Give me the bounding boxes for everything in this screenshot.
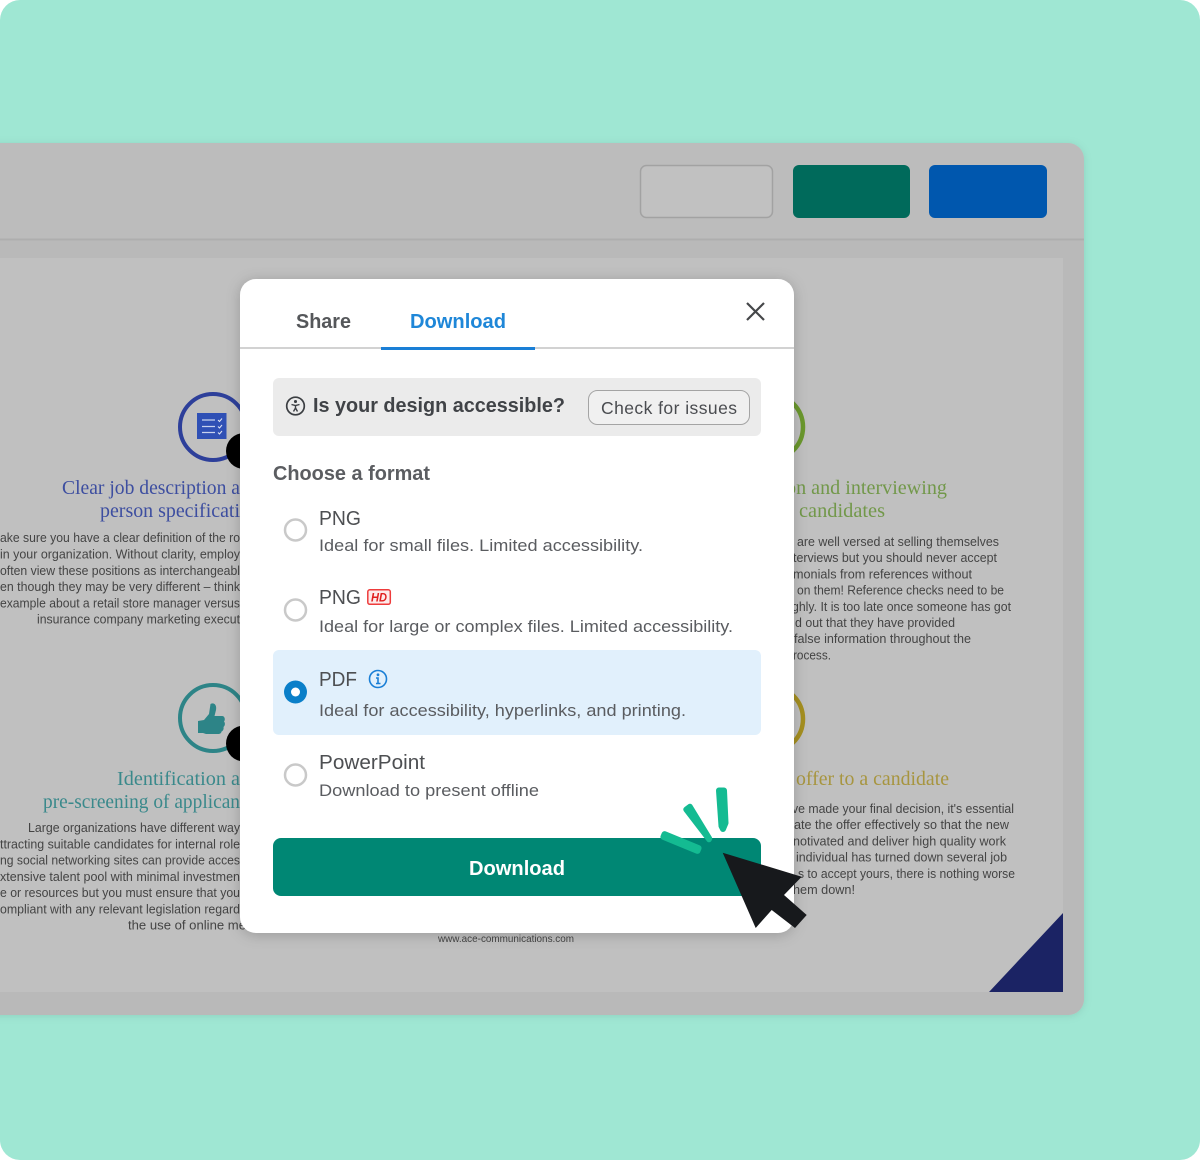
- icon: accessibility: [287, 397, 304, 415]
- option: PowerPoint: [285, 752, 539, 800]
- icon: close: [747, 303, 764, 320]
- icon: click sparks: [663, 790, 726, 851]
- text: identification: xtensive talent pool with minimal investmen: [0, 870, 240, 884]
- option: PDF selected: Ideal for accessibility, hyperlinks, and printing.: [319, 701, 686, 720]
- text: identification: ompliant with any relevant legislation regard: [0, 902, 240, 916]
- text: identification: Large organizations have different way: [28, 821, 241, 835]
- option: PDF selected: [273, 650, 761, 735]
- text: interviewing: on them! Reference checks need to be: [797, 584, 1004, 598]
- text: job description: en though they may be very different – think: [0, 580, 241, 594]
- button: download: Download: [469, 858, 565, 880]
- icon: info: [370, 670, 386, 688]
- tab: share: Share: [296, 311, 351, 333]
- footer url: www.ace-communications.com: [437, 933, 574, 945]
- button: blue: [929, 165, 1047, 218]
- option: PDF selected: PDF: [319, 669, 357, 691]
- button: download: [273, 838, 761, 896]
- heading: interviewing: [794, 480, 946, 517]
- option: PNG HD: PNG: [319, 587, 361, 609]
- text: job description: [0, 531, 241, 626]
- text: offer: individual has turned down several job: [796, 851, 1007, 865]
- text: interviewing: rocess.: [793, 648, 831, 662]
- heading: identification: [43, 768, 240, 813]
- button: check for issues: [588, 390, 750, 424]
- text: job description: often view these positions as interchangeabl: [0, 564, 240, 578]
- text: offer: notivated and deliver high quality work: [793, 834, 1007, 848]
- button: green: [793, 165, 910, 218]
- option: PowerPoint: Download to present offline: [319, 781, 539, 800]
- corner triangle: [989, 913, 1063, 992]
- text: offer: hem down!: [793, 883, 855, 897]
- text: offer: [792, 802, 1015, 897]
- text: job description: insurance company marketing execut: [37, 612, 241, 626]
- tab divider: [240, 347, 794, 350]
- heading: identification: pre-screening of applican: [43, 791, 240, 813]
- heading: job description: [62, 477, 240, 522]
- heading: identification: Identification a: [117, 768, 240, 790]
- option: PNG: Ideal for small files. Limited accessibility.: [319, 536, 643, 555]
- text: identification: the use of online me: [128, 918, 246, 932]
- icon: offer ring: [794, 693, 806, 745]
- text: job description: ake sure you have a clear definition of the ro: [0, 531, 240, 545]
- heading: interviewing: on and interviewing: [786, 477, 947, 499]
- text: interviewing: monials from references without: [793, 567, 973, 581]
- text: identification: e or resources but you must ensure that you: [0, 886, 240, 900]
- option: PNG HD: [285, 587, 733, 636]
- option: PowerPoint: PowerPoint: [319, 752, 425, 774]
- button: check for issues: Check for issues: [601, 398, 737, 418]
- badge: HD: [368, 590, 390, 604]
- text: identification: [0, 821, 246, 932]
- heading: job description: Clear job description a: [62, 477, 240, 499]
- text: job description: example about a retail store manager versus: [0, 596, 240, 610]
- panel: infographic page: [0, 392, 1063, 992]
- text: offer: ve made your final decision, it's essential: [792, 802, 1014, 816]
- heading: job description: person specificati: [100, 500, 240, 522]
- button: outline: [640, 166, 772, 218]
- panel: editor window: [0, 143, 1084, 1015]
- icon: interviewing ring: [794, 401, 806, 453]
- text: offer: s to accept yours, there is nothing worse: [798, 867, 1015, 881]
- panel: accessibility bar: [273, 378, 761, 436]
- panel: download dialog: [240, 279, 794, 933]
- badge: HD: HD: [371, 592, 387, 604]
- icon: job description: [178, 392, 240, 468]
- text: identification: ng social networking sites can provide acces: [0, 854, 240, 868]
- text: interviewing: d out that they have provided: [795, 616, 955, 630]
- text: identification: ttracting suitable candidates for internal role: [0, 837, 240, 851]
- icon: cursor: [723, 853, 807, 928]
- tab: download: Download: [410, 311, 506, 333]
- text: offer: ate the offer effectively so that the new: [794, 818, 1010, 832]
- text: interviewing: terviews but you should never accept: [793, 551, 998, 565]
- heading: choose a format: Choose a format: [273, 463, 430, 485]
- heading: offer: offer to a candidate: [796, 768, 949, 790]
- option: PNG: PNG: [319, 508, 361, 530]
- option: PNG: [285, 508, 643, 555]
- text: interviewing: are well versed at selling themselves: [797, 535, 999, 549]
- text: interviewing: [792, 535, 1012, 662]
- text: interviewing: ghly. It is too late once someone has got: [792, 600, 1012, 614]
- text: job description: in your organization. Without clarity, employ: [0, 548, 241, 562]
- option: PNG HD: Ideal for large or complex files. Limited accessibility.: [319, 617, 733, 636]
- text: accessibility prompt: Is your design accessible?: [313, 395, 565, 417]
- text: interviewing: false information throughout the: [794, 632, 971, 646]
- icon: thumbs up: [178, 683, 240, 761]
- heading: interviewing: candidates: [799, 500, 885, 522]
